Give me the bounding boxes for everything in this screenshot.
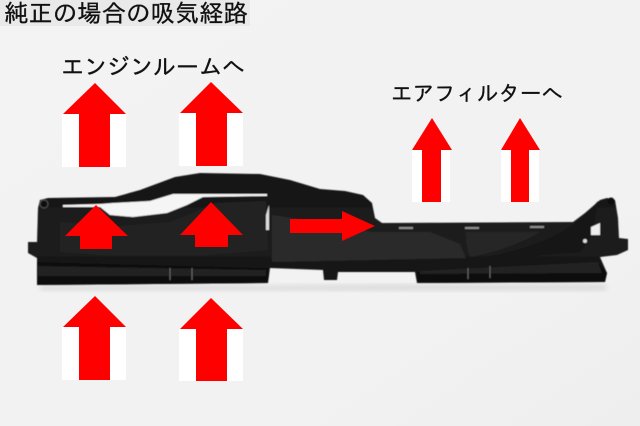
arrow: top right, to engine room	[179, 82, 243, 166]
curved rib on right	[470, 201, 598, 260]
right bracket opening	[591, 223, 600, 235]
arrow: top left, to engine room	[62, 83, 126, 167]
vents	[399, 226, 544, 229]
title background band	[0, 0, 250, 26]
part shadow	[40, 285, 606, 290]
arrow: to air filter right	[501, 118, 540, 202]
duct cutout	[63, 194, 267, 217]
black air intake duct part	[28, 173, 628, 285]
lighter panel shading	[60, 201, 268, 256]
lower flange	[37, 262, 268, 285]
label: to air filter: エアフィルターへ	[391, 82, 563, 106]
arrow: inside duct right	[180, 202, 243, 247]
arrow: inside duct left	[65, 205, 128, 249]
arrow: bottom right, intake	[179, 298, 243, 381]
arrow: to air filter left	[412, 118, 452, 202]
label: to engine room: エンジンルームへ	[61, 54, 245, 80]
arrow: bottom left, intake	[62, 296, 126, 380]
end knob	[40, 200, 48, 208]
title: 純正の場合の吸気経路	[4, 1, 248, 28]
small highlights	[170, 266, 490, 280]
arrow: along duct to the right	[290, 211, 375, 241]
